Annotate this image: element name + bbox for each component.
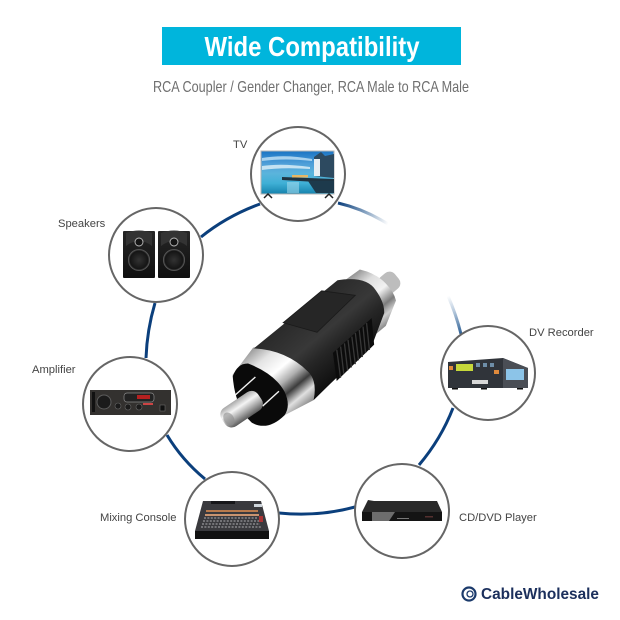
- front shell opening: [219, 354, 297, 435]
- device circle: TV: [251, 127, 345, 221]
- title banner: Wide Compatibility: [204, 31, 420, 62]
- logo: CableWholesale: CableWholesale: [481, 586, 599, 603]
- rear silver barrel: [336, 253, 417, 334]
- front silver shell: [227, 327, 329, 430]
- label: Speakers: Speakers: [58, 218, 106, 230]
- title banner: [162, 27, 461, 65]
- device circle: Speakers: [109, 208, 203, 302]
- black body: [254, 265, 405, 408]
- device circle: DV Recorder: [441, 326, 535, 420]
- top grip patch: [283, 276, 358, 345]
- device circle: Mixing Console: [185, 472, 279, 566]
- label: Mixing Console: Mixing Console: [100, 512, 176, 524]
- label: DV Recorder: DV Recorder: [529, 327, 594, 339]
- prong highlights: [235, 371, 280, 415]
- connecting ring arcs: [146, 203, 461, 514]
- centre pin: [217, 388, 266, 431]
- side ribbed grip patch: [320, 318, 388, 381]
- RCA coupler product image: [215, 248, 424, 440]
- label: Amplifier: Amplifier: [32, 364, 76, 376]
- subtitle: RCA Coupler / Gender Changer, RCA Male to RCA Male: [153, 79, 469, 96]
- device circle: CD/DVD Player: [355, 464, 449, 558]
- device circle: Amplifier: [83, 357, 177, 451]
- label: TV: TV: [233, 139, 248, 151]
- label: CD/DVD Player: CD/DVD Player: [459, 512, 537, 524]
